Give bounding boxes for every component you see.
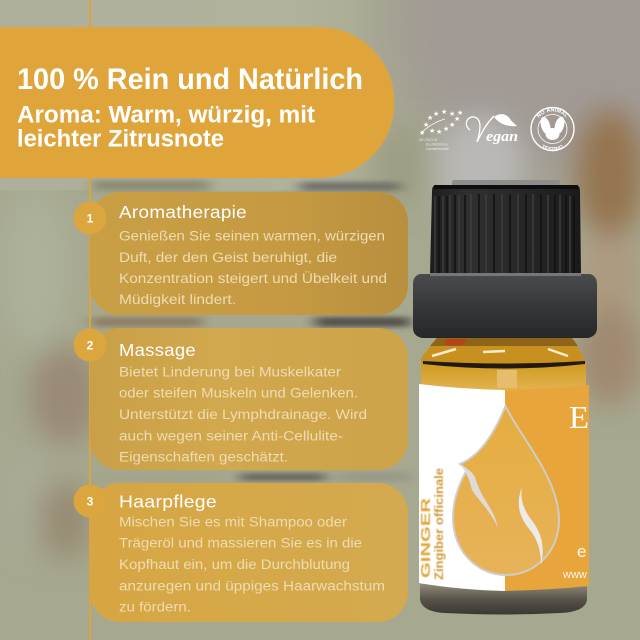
badge 1: 1 xyxy=(87,212,94,226)
body text: Duft, der den Geist beruhigt, die xyxy=(119,250,337,266)
body text: Genießen Sie seinen warmen, würzigen xyxy=(119,228,385,244)
label small fragment: www xyxy=(562,569,587,581)
label product name xyxy=(418,468,446,580)
body text: Mischen Sie es mit Shampoo oder xyxy=(119,515,347,531)
body text xyxy=(119,365,367,466)
body text: Eigenschaften geschätzt. xyxy=(119,450,288,466)
label product name: Zingiber officinale xyxy=(434,468,446,580)
label brand fragment: E xyxy=(569,399,589,435)
icon: no animal testing logo xyxy=(530,106,575,152)
icon: EU organic logo: ★ xyxy=(449,110,455,118)
icon: EU organic logo xyxy=(419,108,463,151)
body text: Trägeröl und massieren Sie es in die xyxy=(119,536,362,552)
bottle cap ribbed xyxy=(430,180,581,276)
icon: EU organic logo: EU-/Nicht-EU- xyxy=(426,142,449,146)
subtitle: leichter Zitrusnote xyxy=(17,126,224,152)
icon: EU organic logo: Landwirtschaft xyxy=(426,147,449,151)
product bottle xyxy=(413,180,597,614)
label small fragment: e xyxy=(577,542,586,561)
icon: EU organic logo: ★ xyxy=(419,129,425,137)
label product name: GINGER xyxy=(418,497,433,578)
badge 2: 2 xyxy=(87,338,94,352)
badge 1 xyxy=(74,202,106,234)
body text: Bietet Linderung bei Muskelkater xyxy=(119,365,341,381)
label: orange side xyxy=(505,385,589,591)
icon: EU organic logo: ★ xyxy=(423,121,429,129)
icon: EU organic logo: ★ xyxy=(433,110,439,118)
label drop icon xyxy=(453,406,559,575)
icon: no animal testing logo: NO ANIMAL xyxy=(536,108,567,118)
body text: anzuregen und üppiges Haarwachstum xyxy=(119,579,385,595)
panel: Haarpflege xyxy=(74,483,408,622)
icon: Vegan logo xyxy=(466,114,518,145)
heading: Aromatherapie xyxy=(119,202,247,222)
bottle glass shoulder xyxy=(421,338,586,390)
body text: auch wegen seiner Anti-Cellulite- xyxy=(119,429,343,445)
heading: Massage xyxy=(119,340,196,360)
panel: Massage xyxy=(74,328,408,470)
subtitle: Aroma: Warm, würzig, mit xyxy=(17,102,315,128)
bottle cap collar xyxy=(413,274,597,338)
icon: EU organic logo: ★ xyxy=(427,114,433,122)
timeline vertical line xyxy=(89,0,91,640)
badge 3: 3 xyxy=(87,494,94,508)
icon: EU organic logo: ★ xyxy=(429,127,435,135)
header banner xyxy=(0,27,394,178)
body text xyxy=(119,515,385,616)
icon: EU organic logo: ★ xyxy=(454,115,460,123)
heading: Haarpflege xyxy=(119,492,217,512)
badge 3 xyxy=(74,484,106,518)
panel: Aromatherapie xyxy=(74,192,408,315)
icon: EU organic logo: ★ xyxy=(443,125,449,133)
title: 100 % Rein und Natürlich xyxy=(17,63,363,96)
icon: EU organic logo: DE-ÖKO-01 xyxy=(419,138,438,142)
body text: zu fördern. xyxy=(119,600,191,616)
body text xyxy=(119,228,387,308)
bottle base xyxy=(420,584,587,614)
icon: EU organic logo: ★ xyxy=(449,121,455,129)
badge 2 xyxy=(74,328,106,362)
icon: Vegan logo: egan xyxy=(486,129,518,145)
icon: EU organic logo: ★ xyxy=(441,108,447,116)
body text: Kopfhaut ein, um die Durchblutung xyxy=(119,557,350,573)
icon: EU organic logo: ★ xyxy=(457,109,463,117)
body text: oder steifen Muskeln und Gelenken. xyxy=(119,386,358,402)
label: white side xyxy=(419,384,505,591)
icon: no animal testing logo: TESTING xyxy=(542,144,564,150)
body text: Konzentration steigert und Übelkeit und xyxy=(119,269,387,287)
body text: Müdigkeit lindert. xyxy=(119,292,236,308)
subtitle xyxy=(17,102,315,152)
body text: Unterstützt die Lymphdrainage. Wird xyxy=(119,407,367,423)
icon: EU organic logo: ★ xyxy=(436,128,442,136)
label small fragment xyxy=(562,542,587,581)
